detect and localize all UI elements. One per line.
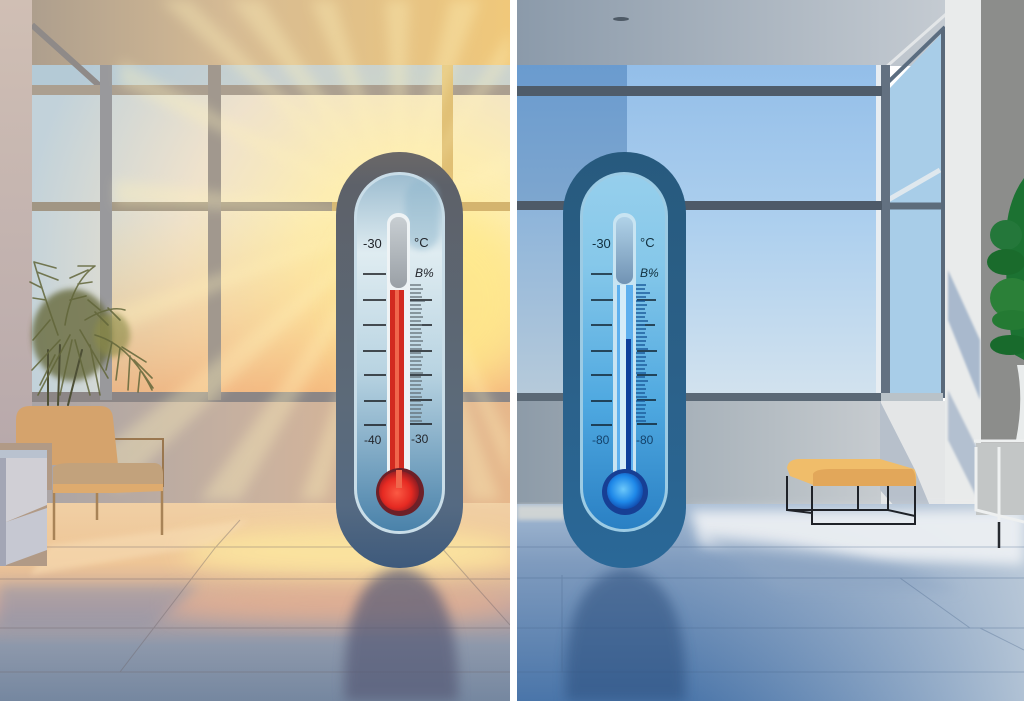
potted plant [987, 178, 1024, 440]
wall below window [32, 400, 510, 504]
scale labels [592, 235, 659, 447]
scale labels: -30 [411, 432, 429, 446]
side window frame [876, 27, 945, 398]
glass tube [613, 213, 636, 488]
panel: warm sunlit room [0, 0, 530, 701]
window glass [517, 30, 945, 400]
scale labels: -80 [636, 433, 654, 447]
thermometer reflection [345, 568, 458, 701]
floor [0, 503, 520, 701]
red bulb [376, 468, 424, 516]
panel: cool blue room [517, 0, 1024, 701]
scale labels: B% [415, 266, 434, 280]
blue bulb [602, 469, 648, 515]
scale ticks [591, 274, 657, 425]
floor [517, 504, 1024, 701]
ceiling [517, 0, 945, 66]
lower wall [517, 401, 945, 504]
scale labels: °C [414, 235, 429, 250]
scale ticks [363, 274, 432, 425]
red mercury column [390, 290, 404, 480]
thermometer reflection [565, 568, 685, 701]
ceiling [0, 0, 510, 66]
right wall [945, 0, 1024, 540]
scale labels [363, 235, 434, 447]
plant: palm [30, 262, 153, 405]
bench [787, 459, 916, 524]
tube empty section [390, 217, 407, 288]
sun rays [90, 0, 510, 500]
thermometer casing [563, 152, 686, 568]
thermometer casing [336, 152, 463, 568]
glass tube [387, 213, 410, 488]
tube empty section [616, 217, 633, 284]
fine scale hatch [409, 285, 425, 421]
scale labels: °C [640, 235, 655, 250]
thermometer face plate [354, 172, 445, 534]
console table [974, 441, 1024, 548]
scale labels: -30 [363, 236, 382, 251]
window mullions [517, 86, 943, 401]
scale labels: -30 [592, 236, 611, 251]
scale labels: -40 [364, 433, 382, 447]
side cabinet [0, 443, 52, 566]
left wall pillar [0, 0, 32, 445]
red thermometer [336, 152, 463, 568]
window glass [32, 65, 530, 400]
blue column [617, 285, 633, 485]
thermometer face plate [580, 172, 668, 532]
fine scale hatch [634, 285, 650, 421]
window frame [32, 25, 510, 402]
blue thermometer [563, 152, 686, 568]
scale labels: B% [640, 266, 659, 280]
scale labels: -80 [592, 433, 610, 447]
chair [16, 406, 163, 540]
